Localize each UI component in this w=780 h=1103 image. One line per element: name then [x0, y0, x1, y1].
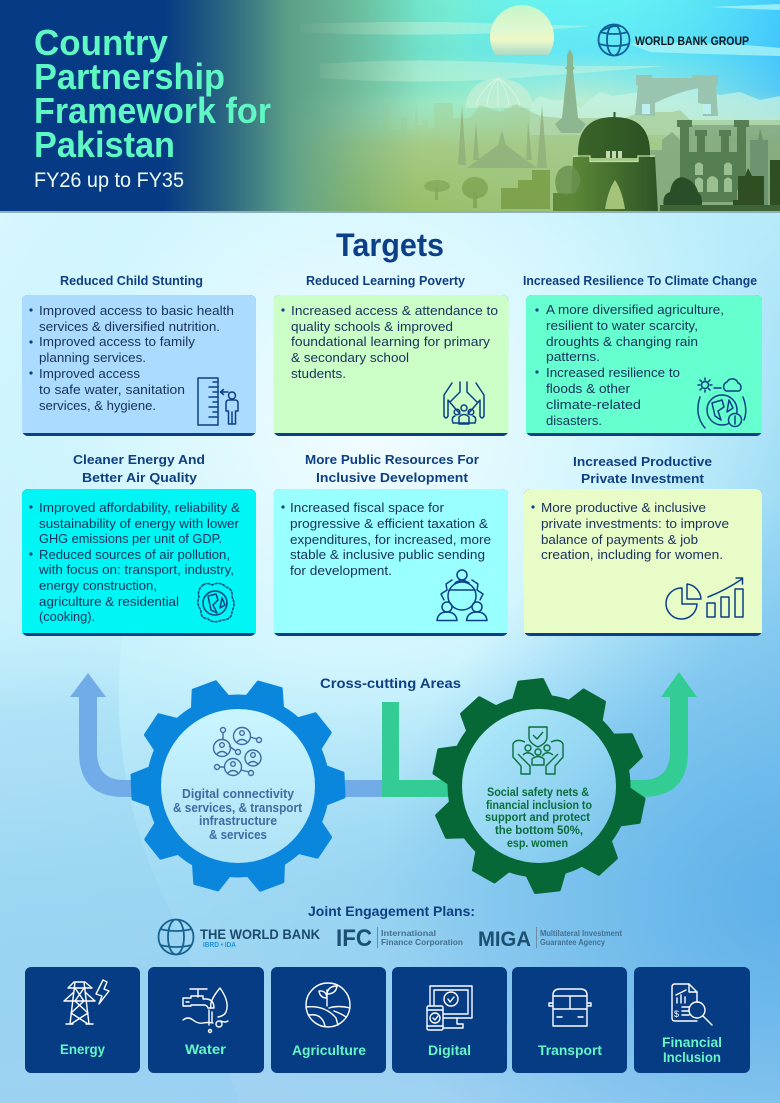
icon: people around a table	[437, 570, 487, 620]
bullet list: with focus on: transport, industry,	[38, 562, 234, 577]
bullet list: Increased resilience to	[546, 365, 680, 380]
logo: The World Bank	[158, 920, 320, 954]
panel: reduced child stunting	[22, 273, 256, 436]
title block: Partnership	[34, 56, 225, 97]
bullet list	[29, 500, 240, 624]
heading: Better Air Quality	[82, 470, 198, 485]
icon: monitor and phone	[427, 986, 472, 1030]
logo: MIGA: MIGA	[478, 928, 531, 951]
bullet list: quality schools & improved	[291, 319, 453, 334]
card: energy: Energy	[60, 1041, 105, 1057]
bullet list: services & diversified nutrition.	[39, 319, 220, 334]
card: transport	[512, 967, 627, 1073]
near right silhouettes	[640, 125, 780, 212]
card: financial inclusion	[634, 967, 750, 1073]
gear: social safety nets	[431, 679, 647, 893]
bullet list: foundational learning for primary	[291, 334, 491, 349]
bullet list: GHG emissions per unit of GDP.	[39, 531, 222, 546]
bullet list: expenditures, for increased, more	[290, 532, 491, 547]
logo: World Bank Group	[598, 24, 749, 56]
heading: Joint Engagement Plans: Joint Engagement Plans:	[308, 903, 475, 919]
logo: MIGA: Guarantee Agency	[540, 937, 605, 947]
bullet list: progressive & efficient taxation &	[290, 516, 488, 531]
bullet list	[29, 303, 234, 413]
logo: The World Bank: THE WORLD BANK	[200, 926, 320, 942]
card: digital: Digital	[428, 1042, 471, 1058]
bullet list: energy construction,	[39, 578, 157, 593]
heading: Private Investment	[581, 471, 705, 486]
text: & services, & transport	[173, 801, 303, 815]
gear: digital connectivity	[132, 679, 344, 893]
logo: MIGA: Multilateral Investment	[540, 928, 622, 938]
logo: IFC: IFC	[336, 925, 372, 952]
text: & services	[209, 828, 267, 842]
icon: pie chart and growth bars	[666, 578, 743, 619]
text: infrastructure	[199, 814, 277, 828]
title block: Pakistan	[34, 124, 175, 165]
bullet list: for development.	[290, 563, 392, 578]
logo: MIGA	[478, 927, 622, 951]
Minar-e-Pakistan	[555, 49, 586, 133]
panel: reduced learning poverty	[274, 273, 508, 436]
panel: increased productive private investment	[524, 454, 762, 636]
bullet list	[281, 303, 498, 381]
logo: The World Bank: IBRD • IDA	[203, 942, 236, 949]
icon: bus	[549, 989, 591, 1026]
panel: cleaner energy and better air quality	[22, 452, 256, 636]
Faisal mosque	[458, 105, 547, 168]
icon: report and magnifier: $	[674, 1009, 679, 1019]
bullet list: students.	[291, 366, 346, 381]
text: financial inclusion to	[486, 800, 592, 812]
Mazar-e-Quaid mausoleum	[570, 112, 658, 212]
bullet list: services, & hygiene.	[39, 398, 156, 413]
heading: Targets: Targets	[336, 227, 444, 263]
bullet list: More productive & inclusive	[541, 500, 706, 515]
text: Social safety nets &	[487, 787, 589, 799]
foreground buildings and trees	[424, 165, 580, 212]
bullet list: Improved access to basic health	[39, 303, 234, 318]
text	[485, 787, 592, 850]
heading: Reduced Learning Poverty	[306, 273, 466, 288]
card: agriculture: Agriculture	[292, 1042, 366, 1058]
bullet list: resilient to water scarcity,	[546, 318, 698, 333]
bullet list: droughts & changing rain	[546, 334, 698, 349]
bullet list: balance of payments & job	[541, 532, 698, 547]
text: support and protect	[485, 812, 590, 824]
bullet list: A more diversified agriculture,	[546, 302, 724, 317]
bullet list: & secondary school	[291, 350, 409, 365]
heading: More Public Resources For	[305, 452, 479, 467]
bullet list: Increased access & attendance to	[291, 303, 498, 318]
dark right building	[733, 160, 780, 212]
text	[173, 787, 303, 842]
text: the bottom 50%,	[495, 825, 583, 837]
bullet list: to safe water, sanitation	[39, 382, 185, 397]
title block: Framework for	[34, 90, 271, 131]
arrow: blue, left up	[70, 673, 383, 797]
bullet list: stable & inclusive public sending	[290, 547, 485, 562]
bullet list: Improved affordability, reliability &	[39, 500, 240, 515]
logo: IFC	[336, 925, 463, 952]
mid skyline	[370, 102, 780, 212]
card: financial inclusion: Inclusion	[663, 1049, 721, 1065]
heading: Increased Resilience To Climate Change	[523, 273, 757, 288]
icon: earth, sun and cloud	[698, 378, 746, 428]
heading: Inclusive Development	[316, 470, 469, 485]
bullet list	[531, 500, 729, 562]
bullet list: floods & other	[546, 381, 631, 396]
logo: IFC: International	[381, 928, 436, 938]
heading	[573, 454, 712, 486]
subtitle: FY26 up to FY35	[34, 169, 184, 192]
bullet list: creation, including for women.	[541, 547, 723, 562]
Khyber gate	[635, 75, 718, 116]
cross-cutting arrows	[70, 672, 697, 797]
panel: increased resilience to climate change	[523, 273, 762, 436]
bullet list: patterns.	[546, 349, 600, 364]
icon: hands protecting family	[444, 382, 484, 424]
header banner	[0, 0, 780, 213]
bullet list: Improved access	[39, 366, 141, 381]
icon: pylon and bolt	[64, 980, 109, 1024]
icon: tap and water drop	[183, 988, 228, 1032]
bullet list: private investments: to improve	[541, 516, 729, 531]
heading	[73, 452, 205, 485]
title block	[34, 22, 271, 165]
bullet list: planning services.	[39, 350, 146, 365]
bullet list: Increased fiscal space for	[290, 500, 445, 515]
text: Digital connectivity	[182, 787, 294, 801]
heading: Reduced Child Stunting	[60, 273, 203, 288]
card: financial inclusion: Financial	[662, 1034, 722, 1050]
bullet list: Improved access to family	[39, 334, 196, 349]
clouds	[300, 22, 665, 82]
bullet list	[281, 500, 491, 578]
logo: World Bank Group: WORLD BANK GROUP	[635, 36, 749, 48]
Badshahi dome	[465, 78, 533, 108]
bullet list: Reduced sources of air pollution,	[39, 547, 230, 562]
far skyline	[530, 88, 780, 135]
logo: IFC: Finance Corporation	[381, 937, 463, 947]
panel: more public resources for inclusive development	[274, 452, 508, 636]
card: water	[148, 967, 264, 1073]
bullet list: sustainability of energy with lower	[39, 516, 240, 531]
card: agriculture	[271, 967, 386, 1073]
card: energy	[25, 967, 140, 1073]
card: water: Water	[185, 1041, 227, 1057]
bullet list: agriculture & residential	[39, 594, 179, 609]
bullet list	[535, 302, 724, 428]
bullet list: climate-related	[546, 397, 641, 412]
heading	[305, 452, 479, 485]
bullet list: disasters.	[546, 413, 602, 428]
heading: Cross-cutting Areas: Cross-cutting Areas	[320, 675, 461, 691]
bullet list: (cooking).	[39, 609, 95, 624]
sun	[490, 5, 554, 55]
arrow: green, right up	[382, 672, 697, 797]
icon: polluted earth	[198, 583, 234, 622]
card: digital	[392, 967, 507, 1073]
icon: shield, people and hands	[513, 727, 563, 774]
icon: sprout and fields	[306, 983, 350, 1027]
title block: Country	[34, 22, 168, 63]
text: esp. women	[507, 838, 568, 850]
card: transport: Transport	[538, 1042, 602, 1058]
heading: Increased Productive	[573, 454, 712, 469]
icon: connected people	[214, 728, 262, 776]
icon: height ruler and child	[198, 378, 238, 425]
tomb towers	[677, 120, 749, 202]
heading: Cleaner Energy And	[73, 452, 205, 467]
